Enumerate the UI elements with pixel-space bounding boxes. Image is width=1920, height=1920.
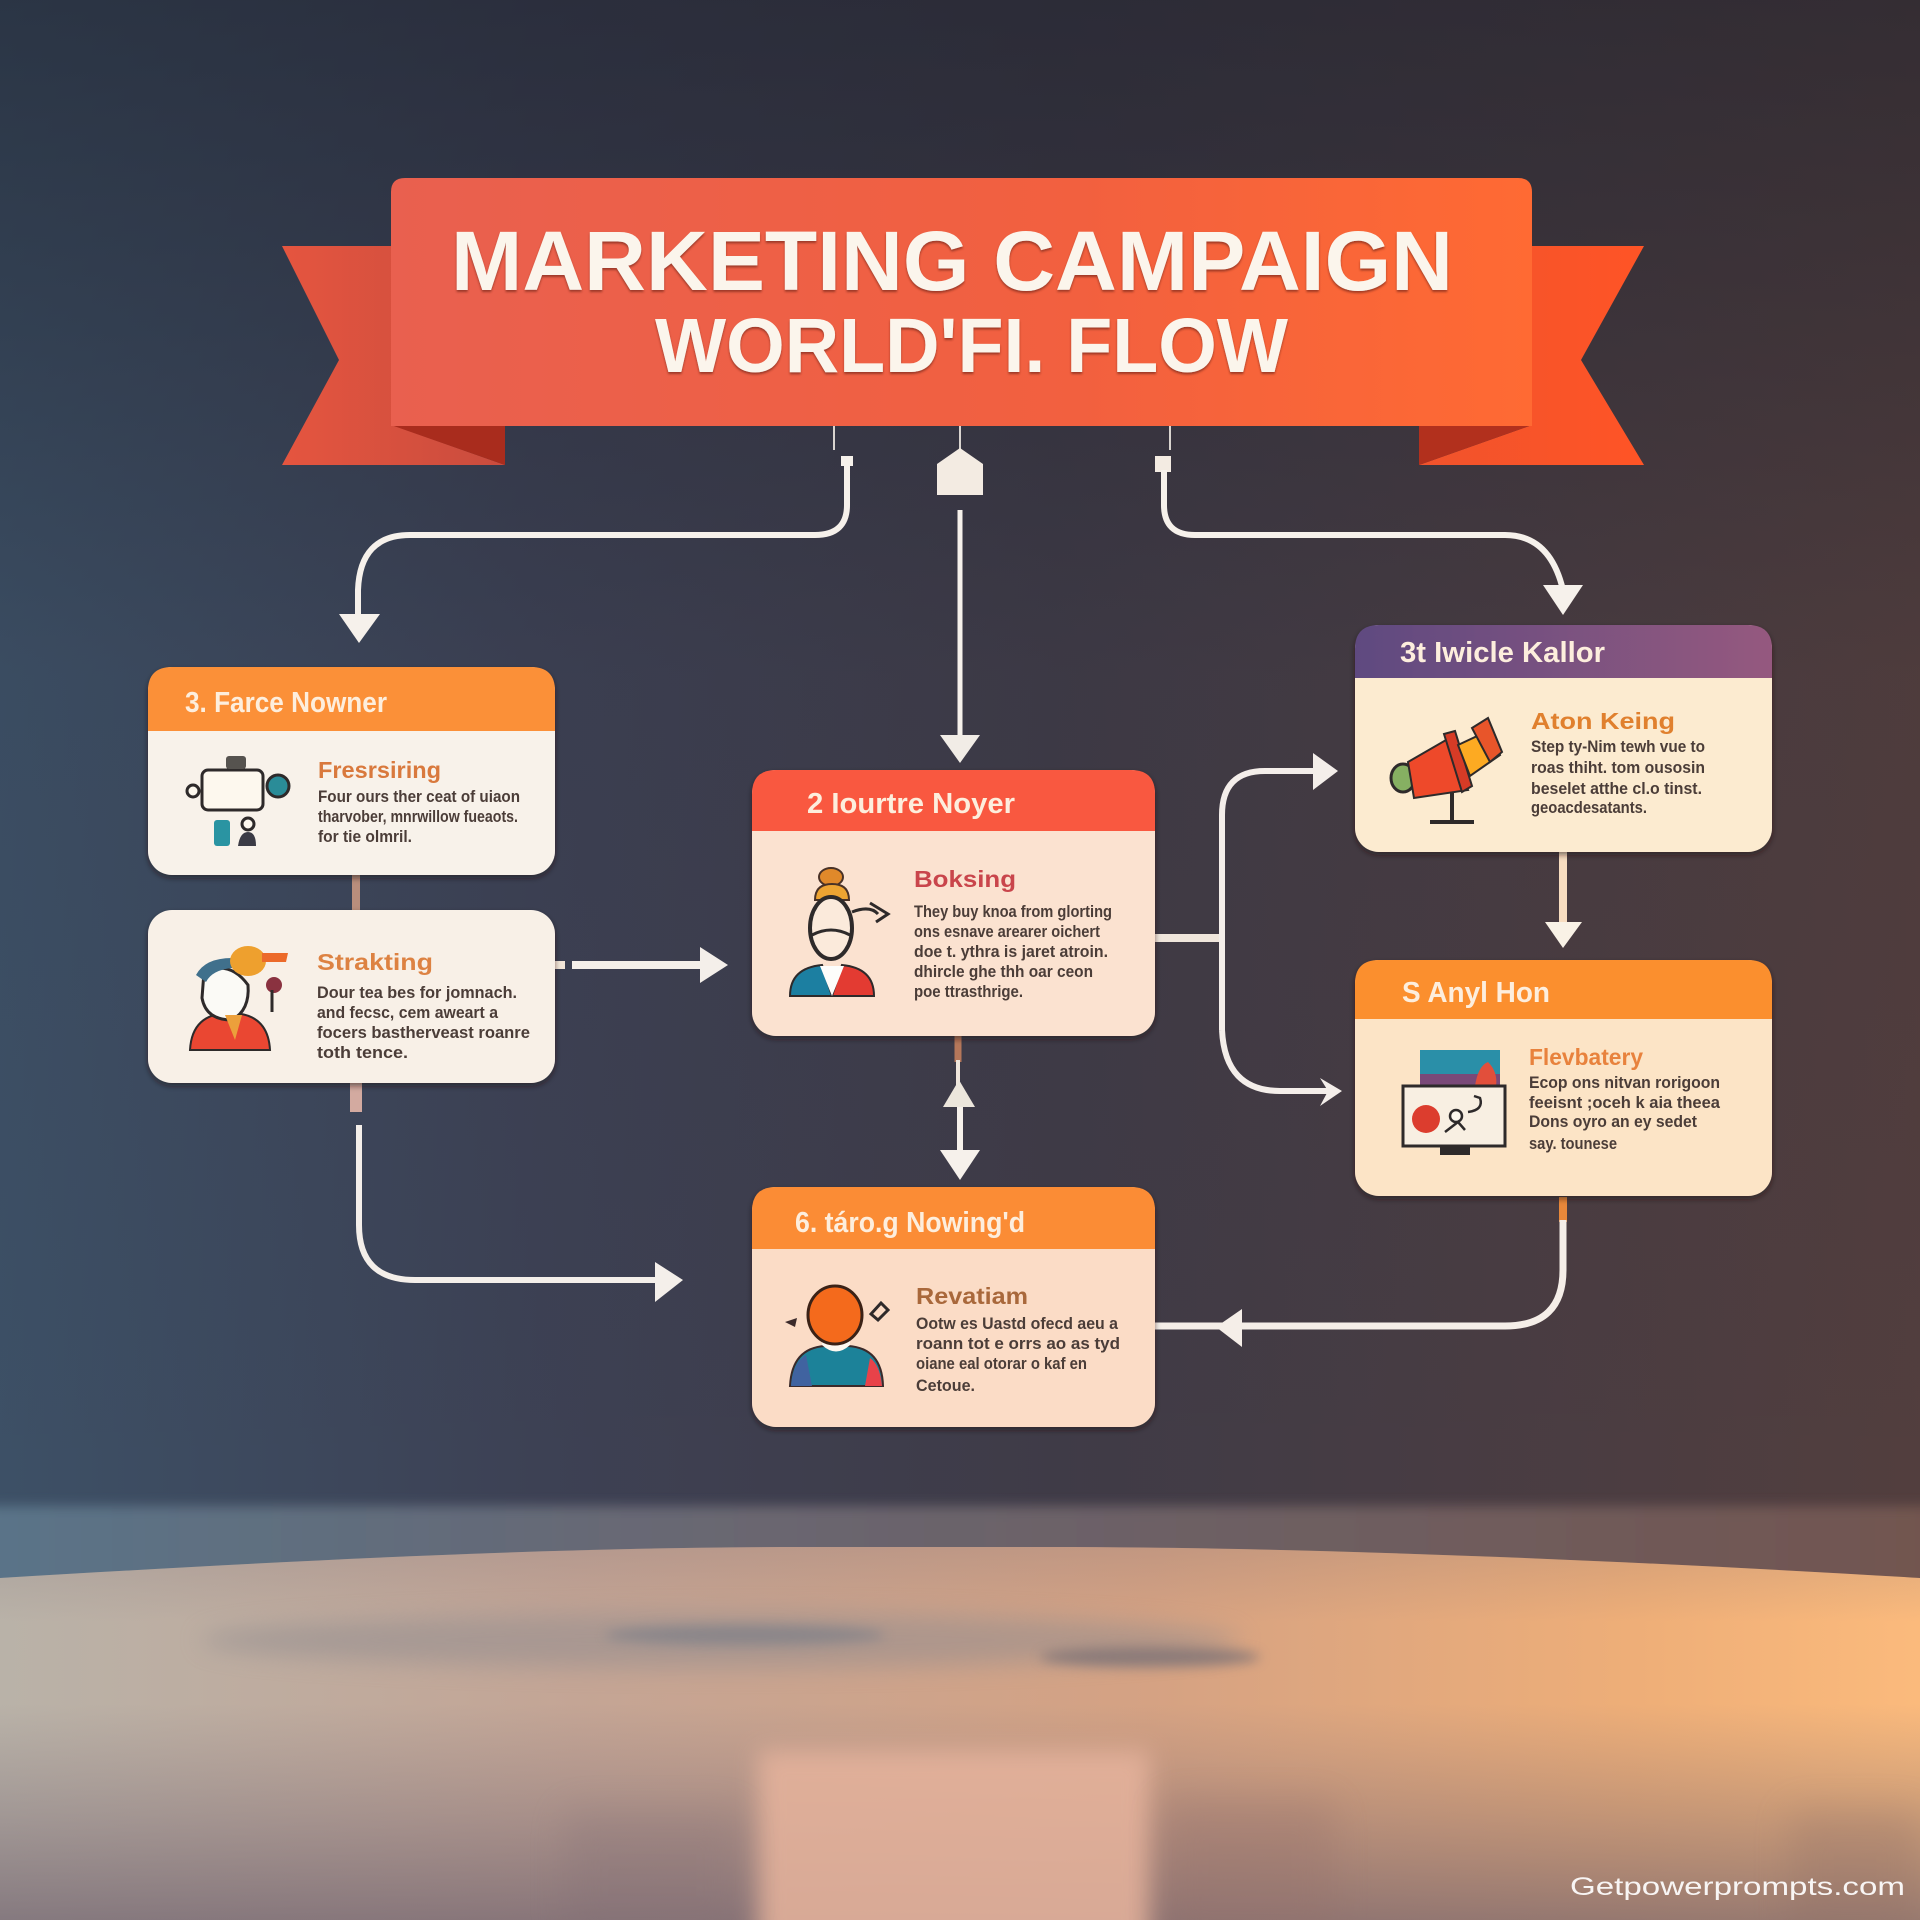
panel: bottom card xyxy=(752,1187,1155,1427)
body text: and fecsc, cem aweart a xyxy=(317,1003,498,1022)
body text: say. tounese xyxy=(1529,1134,1617,1153)
connector: card 1 to card 2 xyxy=(352,875,360,912)
body text: roas thiht. tom ousosin xyxy=(1531,758,1705,777)
icon: device xyxy=(187,756,289,846)
arrow: banner to left card xyxy=(339,426,853,643)
panel: right top card xyxy=(1355,625,1772,852)
body text: for tie olmril. xyxy=(318,827,412,846)
subheading: Aton Keing xyxy=(1531,708,1675,734)
banner folds xyxy=(391,425,505,465)
icon: monitor xyxy=(1403,1050,1505,1155)
card header xyxy=(752,770,1155,831)
floor xyxy=(0,1506,1920,1920)
body text: roann tot e orrs ao as tyd xyxy=(916,1334,1120,1353)
card title: 3t Iwicle Kallor xyxy=(1400,637,1605,669)
body text xyxy=(317,983,530,1062)
body text: Dour tea bes for jomnach. xyxy=(317,983,517,1002)
icon: person with round head xyxy=(785,1286,888,1386)
body text xyxy=(1529,1073,1721,1153)
banner xyxy=(282,178,1644,465)
body text: Ootw es Uastd ofecd aeu a xyxy=(916,1314,1119,1333)
arrow: center card to bottom card xyxy=(940,1036,980,1180)
body text: Dons oyro an ey sedet xyxy=(1529,1112,1697,1131)
icon: person with flower xyxy=(190,946,288,1050)
panel: step 2 card xyxy=(148,910,555,1083)
subheading: Flevbatery xyxy=(1529,1044,1643,1070)
card header xyxy=(148,667,555,731)
card header xyxy=(752,1187,1155,1249)
body text xyxy=(914,902,1112,1001)
arrow: right bottom card to bottom card xyxy=(1155,1197,1563,1347)
panel: step 1 card xyxy=(148,667,555,875)
subheading: Boksing xyxy=(914,866,1016,892)
card title: 2 Iourtre Noyer xyxy=(807,788,1015,820)
arrow: right top card to right bottom card xyxy=(1545,852,1582,948)
card header xyxy=(1355,625,1772,678)
icon: megaphone xyxy=(1391,718,1502,822)
body text: They buy knoa from glorting xyxy=(914,902,1112,921)
card header xyxy=(1355,960,1772,1019)
body text: focers bastherveast roanre xyxy=(317,1023,530,1042)
arrow: card 2 to bottom card xyxy=(356,1083,683,1302)
arrow: banner to center card xyxy=(937,426,983,763)
icon: bearded person xyxy=(790,868,888,996)
arrow: banner to right card xyxy=(1155,426,1583,615)
body text: oiane eal otorar o kaf en xyxy=(916,1354,1087,1373)
body text: feeisnt ;oceh k aia theea xyxy=(1529,1093,1721,1112)
body text: beselet atthe cl.o tinst. xyxy=(1531,779,1702,798)
body text: Four ours ther ceat of uiaon xyxy=(318,787,520,806)
body text xyxy=(1531,737,1705,817)
body text: dhircle ghe thh oar ceon xyxy=(914,962,1093,981)
subheading: Revatiam xyxy=(916,1283,1028,1309)
card title: 6. táro.g Nowing'd xyxy=(795,1207,1025,1239)
arrow: center card branching to right cards xyxy=(1155,753,1342,1106)
body text: doe t. ythra is jaret atroin. xyxy=(914,942,1108,961)
banner left tail xyxy=(282,246,505,465)
title line 2: WORLD'FI. FLOW xyxy=(655,303,1288,389)
watermark: Getpowerprompts.com xyxy=(1570,1873,1905,1901)
card title: 3. Farce Nowner xyxy=(185,687,387,719)
panel: center card xyxy=(752,770,1155,1036)
card title: S Anyl Hon xyxy=(1402,977,1550,1009)
body text xyxy=(318,787,520,846)
body text xyxy=(916,1314,1120,1395)
banner main xyxy=(391,178,1532,426)
panel: right bottom card xyxy=(1355,960,1772,1196)
body text: toth tence. xyxy=(317,1043,408,1062)
body text: tharvober, mnrwillow fueaots. xyxy=(318,807,518,826)
body text: Cetoue. xyxy=(916,1376,975,1395)
arrow: card 2 to center card xyxy=(555,947,728,983)
banner right tail xyxy=(1419,246,1644,465)
body text: geoacdesatants. xyxy=(1531,798,1647,817)
body text: poe ttrasthrige. xyxy=(914,982,1023,1001)
subheading: Strakting xyxy=(317,949,433,975)
title line 1: MARKETING CAMPAIGN xyxy=(451,214,1453,308)
body text: Step ty-Nim tewh vue to xyxy=(1531,737,1705,756)
body text: Ecop ons nitvan rorigoon xyxy=(1529,1073,1720,1092)
subheading: Fresrsiring xyxy=(318,757,441,783)
body text: ons esnave arearer oichert xyxy=(914,922,1100,941)
